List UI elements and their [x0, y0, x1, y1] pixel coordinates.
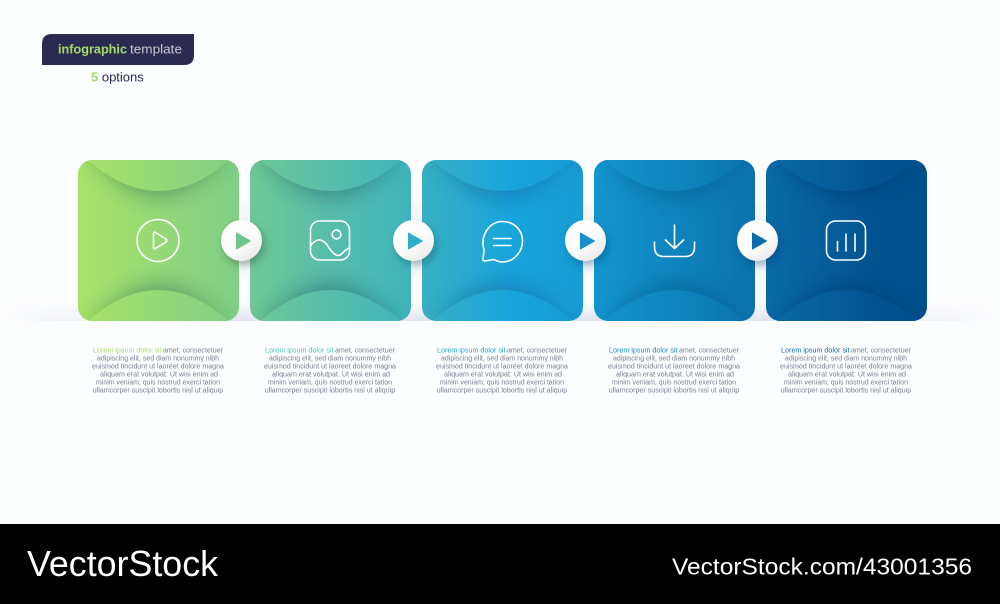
text block 1: aliquam erat volutpat. Ut wisi enim ad	[100, 369, 218, 378]
text block 3: amet, consectetuer	[507, 345, 568, 354]
footer url: VectorStock.com/43001356	[672, 554, 972, 580]
text block 2: amet, consectetuer	[335, 345, 396, 354]
text block 2: Lorem ipsum dolor sit	[265, 345, 334, 354]
icon: image	[310, 221, 350, 260]
text block 4: minim veniam, quis nostrud exerci tation	[612, 378, 736, 387]
subtitle: 5 options	[91, 70, 144, 84]
title text: infographic	[58, 42, 127, 56]
arrow button 3	[565, 220, 608, 266]
text block 1: adipiscing elit, sed diam nonummy nibh	[97, 353, 219, 362]
panel: card 2	[250, 160, 411, 321]
text block 2: euismod tincidunt ut laoreet dolore magna	[264, 362, 396, 371]
text block 2	[264, 345, 396, 395]
icon: download	[654, 225, 694, 256]
panel: card 3	[422, 160, 583, 321]
icon: chat bubble	[483, 222, 522, 262]
text block 2: adipiscing elit, sed diam nonummy nibh	[269, 353, 391, 362]
text block 5: euismod tincidunt ut laoreet dolore magna	[780, 362, 912, 371]
text block 2: ullamcorper suscipit lobortis nisl ut aliquip	[265, 386, 395, 395]
text block 1: ullamcorper suscipit lobortis nisl ut aliquip	[93, 386, 223, 395]
arrow button 2	[393, 220, 436, 266]
title text: template	[130, 42, 182, 56]
title badge	[42, 34, 194, 65]
text block 4: aliquam erat volutpat. Ut wisi enim ad	[616, 369, 734, 378]
panel: card 5	[766, 160, 927, 321]
text block 1	[92, 345, 224, 395]
text block 1: amet, consectetuer	[163, 345, 224, 354]
text block 5: adipiscing elit, sed diam nonummy nibh	[785, 353, 907, 362]
text block 5: ullamcorper suscipit lobortis nisl ut aliquip	[781, 386, 911, 395]
arrow button 1	[221, 220, 264, 266]
text block 1: euismod tincidunt ut laoreet dolore magna	[92, 362, 224, 371]
text block 3	[436, 345, 568, 395]
text block 5: minim veniam, quis nostrud exerci tation	[784, 378, 908, 387]
arrow button 4	[737, 220, 780, 266]
text block 4: Lorem ipsum dolor sit	[609, 345, 678, 354]
text block 5: aliquam erat volutpat. Ut wisi enim ad	[788, 369, 906, 378]
text block 1: minim veniam, quis nostrud exerci tation	[96, 378, 220, 387]
text block 1: Lorem ipsum dolor sit	[93, 345, 162, 354]
text block 5: Lorem ipsum dolor sit	[781, 345, 850, 354]
text block 3: adipiscing elit, sed diam nonummy nibh	[441, 353, 563, 362]
text block 2: minim veniam, quis nostrud exerci tation	[268, 378, 392, 387]
text block 3: Lorem ipsum dolor sit	[437, 345, 506, 354]
panel: card 4	[594, 160, 755, 321]
text block 3: minim veniam, quis nostrud exerci tation	[440, 378, 564, 387]
title text	[58, 42, 182, 56]
text block 3: ullamcorper suscipit lobortis nisl ut aliquip	[437, 386, 567, 395]
text block 4: euismod tincidunt ut laoreet dolore magna	[608, 362, 740, 371]
text block 3: aliquam erat volutpat. Ut wisi enim ad	[444, 369, 562, 378]
panel: card 1	[78, 160, 239, 321]
icon: bar chart	[826, 221, 866, 260]
text block 2: aliquam erat volutpat. Ut wisi enim ad	[272, 369, 390, 378]
footer bar	[0, 524, 1000, 604]
text block 5: amet, consectetuer	[851, 345, 912, 354]
text block 4: ullamcorper suscipit lobortis nisl ut aliquip	[609, 386, 739, 395]
footer logo: VectorStock	[27, 543, 219, 584]
text block 4: adipiscing elit, sed diam nonummy nibh	[613, 353, 735, 362]
text block 5	[780, 345, 912, 395]
text block 4	[608, 345, 740, 395]
text block 3: euismod tincidunt ut laoreet dolore magna	[436, 362, 568, 371]
icon: play circle	[137, 220, 179, 262]
text block 4: amet, consectetuer	[679, 345, 740, 354]
